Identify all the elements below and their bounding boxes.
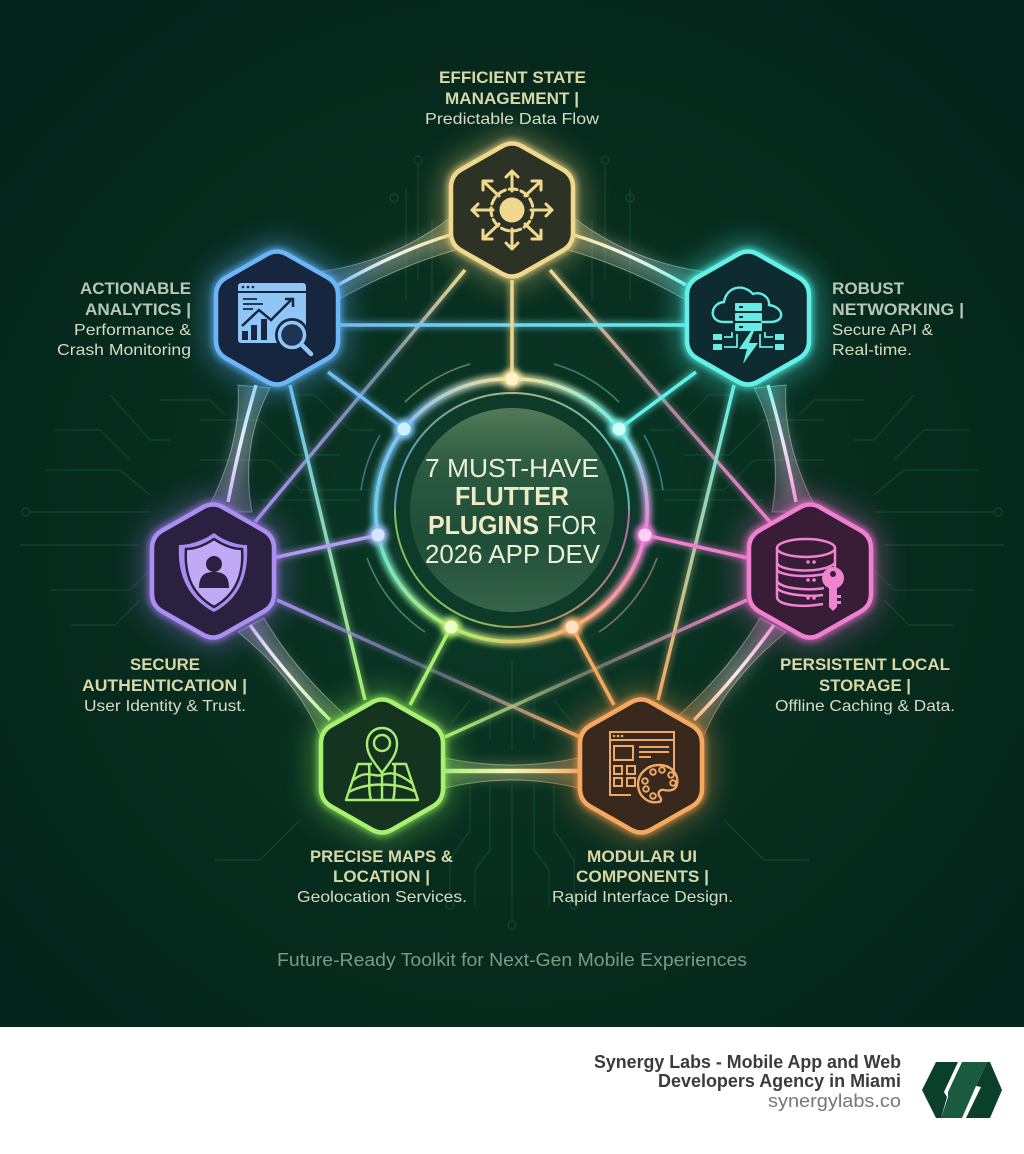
background circuit traces bbox=[20, 156, 1004, 929]
chord line glow bbox=[255, 270, 770, 737]
spoke glow bbox=[273, 280, 748, 705]
hub outer ring bbox=[376, 379, 647, 642]
hub inner thin ring bbox=[395, 393, 629, 627]
hexagon glow bbox=[451, 144, 573, 276]
label: modular UI components: MODULAR UI bbox=[587, 847, 697, 866]
spokes from hexagons to central hub bbox=[273, 280, 748, 705]
label: secure authentication: SECURE bbox=[130, 655, 200, 674]
hexagon body bbox=[152, 504, 274, 638]
label: secure authentication: User Identity & Trust. bbox=[84, 698, 246, 715]
hub title: PLUGINS bbox=[428, 510, 539, 540]
hexagon body bbox=[580, 700, 702, 832]
label: precise maps and location bbox=[297, 847, 467, 906]
hub connection nodes bbox=[368, 369, 655, 637]
hub title: FOR bbox=[547, 510, 597, 540]
hexagon body bbox=[321, 700, 443, 832]
node glows bbox=[368, 369, 655, 637]
label: precise maps and location: Geolocation Services. bbox=[297, 889, 467, 906]
hexagon: robust networking bbox=[687, 252, 809, 384]
hub title: 7 MUST-HAVE bbox=[425, 453, 599, 483]
label: efficient state management: MANAGEMENT | bbox=[445, 89, 579, 108]
footer company text: synergylabs.co bbox=[768, 1091, 901, 1111]
label: efficient state management: EFFICIENT STATE bbox=[439, 68, 586, 87]
label: robust networking: Secure API & bbox=[832, 322, 933, 339]
icon: radiating state arrows bbox=[472, 171, 552, 249]
footer white band bbox=[0, 1027, 1024, 1154]
hexagon: persistent local storage bbox=[749, 504, 871, 638]
label: actionable analytics: Crash Monitoring bbox=[57, 342, 191, 359]
icon: analytics dashboard with magnifier bbox=[238, 283, 311, 354]
hub title: 2026 APP DEV bbox=[425, 539, 601, 569]
hexagon: secure authentication bbox=[152, 504, 274, 638]
hub title bbox=[425, 453, 601, 569]
label: persistent local storage: Offline Caching & Data. bbox=[775, 698, 955, 715]
hexagon body bbox=[687, 252, 809, 384]
label: persistent local storage: PERSISTENT LOCAL bbox=[780, 655, 950, 674]
hub outer ring glow bbox=[376, 379, 647, 642]
label: efficient state management: Predictable Data Flow bbox=[425, 111, 599, 128]
hub title: FLUTTER bbox=[455, 481, 569, 511]
hexagon glow bbox=[152, 504, 274, 638]
chord lines across the network bbox=[255, 270, 770, 737]
icon: cloud server with lightning bolt bbox=[713, 288, 784, 364]
hexagon glow bbox=[687, 252, 809, 384]
label: actionable analytics: ACTIONABLE bbox=[80, 279, 191, 298]
icon: shield with user bbox=[179, 533, 247, 612]
label: modular UI components: Rapid Interface Design. bbox=[552, 889, 733, 906]
hexagon glow bbox=[580, 700, 702, 832]
hexagon: actionable analytics bbox=[216, 252, 338, 384]
label: persistent local storage bbox=[775, 655, 955, 715]
flared translucent connection bands bbox=[206, 218, 818, 788]
label: efficient state management bbox=[425, 68, 599, 128]
label: actionable analytics bbox=[57, 279, 191, 359]
hexagon body bbox=[216, 252, 338, 384]
label: robust networking: Real-time. bbox=[832, 342, 912, 359]
soft glow of outer connections bbox=[228, 235, 796, 772]
footer company text bbox=[594, 1052, 901, 1111]
hub disk bbox=[410, 408, 614, 612]
label: precise maps and location: LOCATION | bbox=[333, 867, 430, 886]
hexagon: efficient state management bbox=[451, 144, 573, 276]
icon: database with key bbox=[777, 539, 844, 611]
hub outer broken arcs bbox=[361, 364, 663, 632]
label: actionable analytics: ANALYTICS | bbox=[85, 300, 191, 319]
hexagon glow bbox=[749, 504, 871, 638]
label: precise maps and location: PRECISE MAPS & bbox=[310, 847, 453, 866]
label: secure authentication: AUTHENTICATION | bbox=[82, 676, 247, 695]
hexagon body bbox=[451, 144, 573, 276]
hexagon glow bbox=[216, 252, 338, 384]
icon: UI window with palette bbox=[610, 732, 677, 802]
network connections between plugin hexagons bbox=[206, 218, 818, 788]
hub dark backing bbox=[379, 377, 645, 643]
label: robust networking: ROBUST bbox=[832, 279, 905, 298]
label: modular UI components: COMPONENTS | bbox=[576, 867, 709, 886]
label: robust networking: NETWORKING | bbox=[832, 300, 964, 319]
label: persistent local storage: STORAGE | bbox=[819, 676, 911, 695]
label: secure authentication bbox=[82, 655, 247, 715]
tagline: Future-Ready Toolkit for Next-Gen Mobile Experiences bbox=[277, 950, 747, 970]
hexagon: precise maps and location bbox=[321, 700, 443, 832]
icon: map with location pin bbox=[346, 728, 418, 800]
footer company text: Synergy Labs - Mobile App and Web bbox=[594, 1052, 901, 1072]
label: modular UI components bbox=[552, 847, 733, 906]
node cores bbox=[372, 372, 652, 634]
footer company text: Developers Agency in Miami bbox=[658, 1071, 901, 1091]
central hub: rings and disk bbox=[361, 364, 663, 643]
hexagon body bbox=[749, 504, 871, 638]
hexagon: modular UI components bbox=[580, 700, 702, 832]
label: actionable analytics: Performance & bbox=[74, 322, 191, 339]
icon: Synergy Labs logo bbox=[922, 1062, 1002, 1118]
bright core of outer connections bbox=[228, 235, 796, 771]
analytics to networking horizontal link bbox=[338, 321, 686, 329]
hexagon glow bbox=[321, 700, 443, 832]
label: robust networking bbox=[832, 279, 964, 359]
